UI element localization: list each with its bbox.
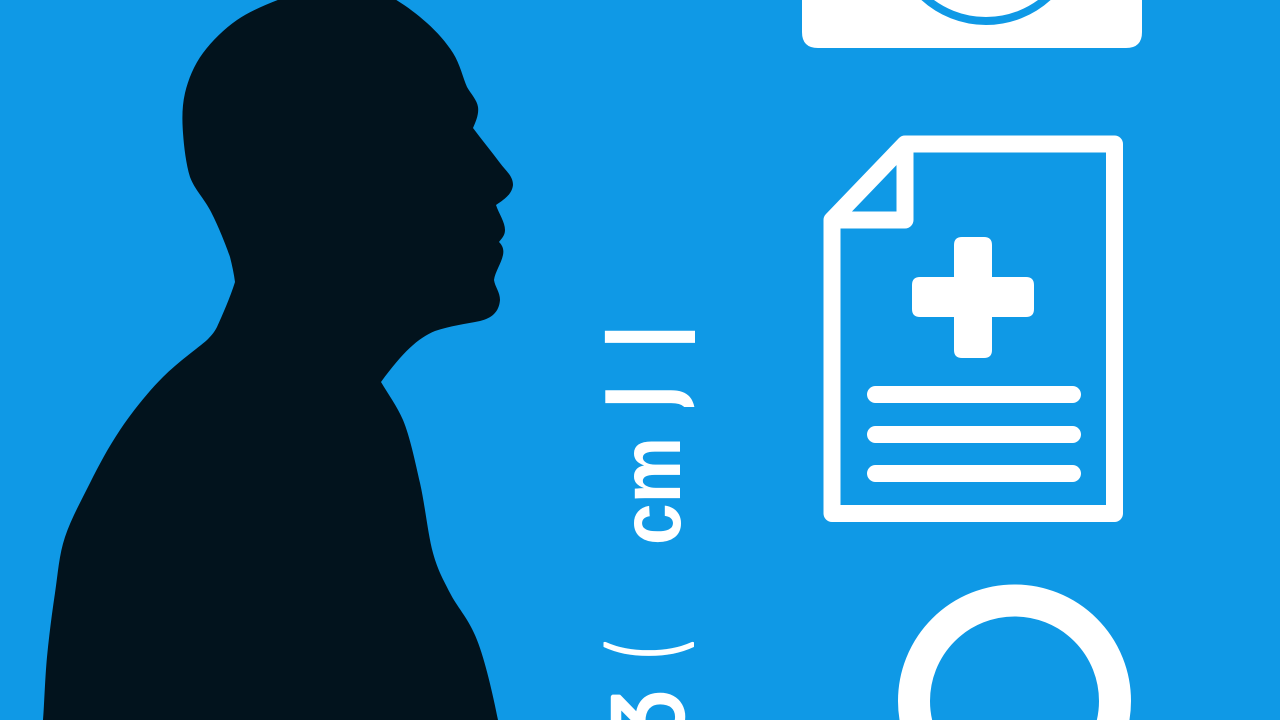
camera lens ring [894,0,1078,21]
medical cross [912,237,1034,358]
rotated letter J: J [587,377,700,423]
document text lines [867,386,1081,482]
folded corner [832,144,905,220]
rotated letter I: I [576,319,723,355]
rotated parenthesis: ( [588,642,693,658]
icon: camera body [802,0,1142,48]
rotated unit label cm: cm [603,437,699,545]
icon: medical document [832,144,1114,514]
rotated text column [604,330,695,720]
icon: human profile silhouette [43,0,513,720]
document outline [832,144,1114,514]
icon: ring [914,600,1115,720]
